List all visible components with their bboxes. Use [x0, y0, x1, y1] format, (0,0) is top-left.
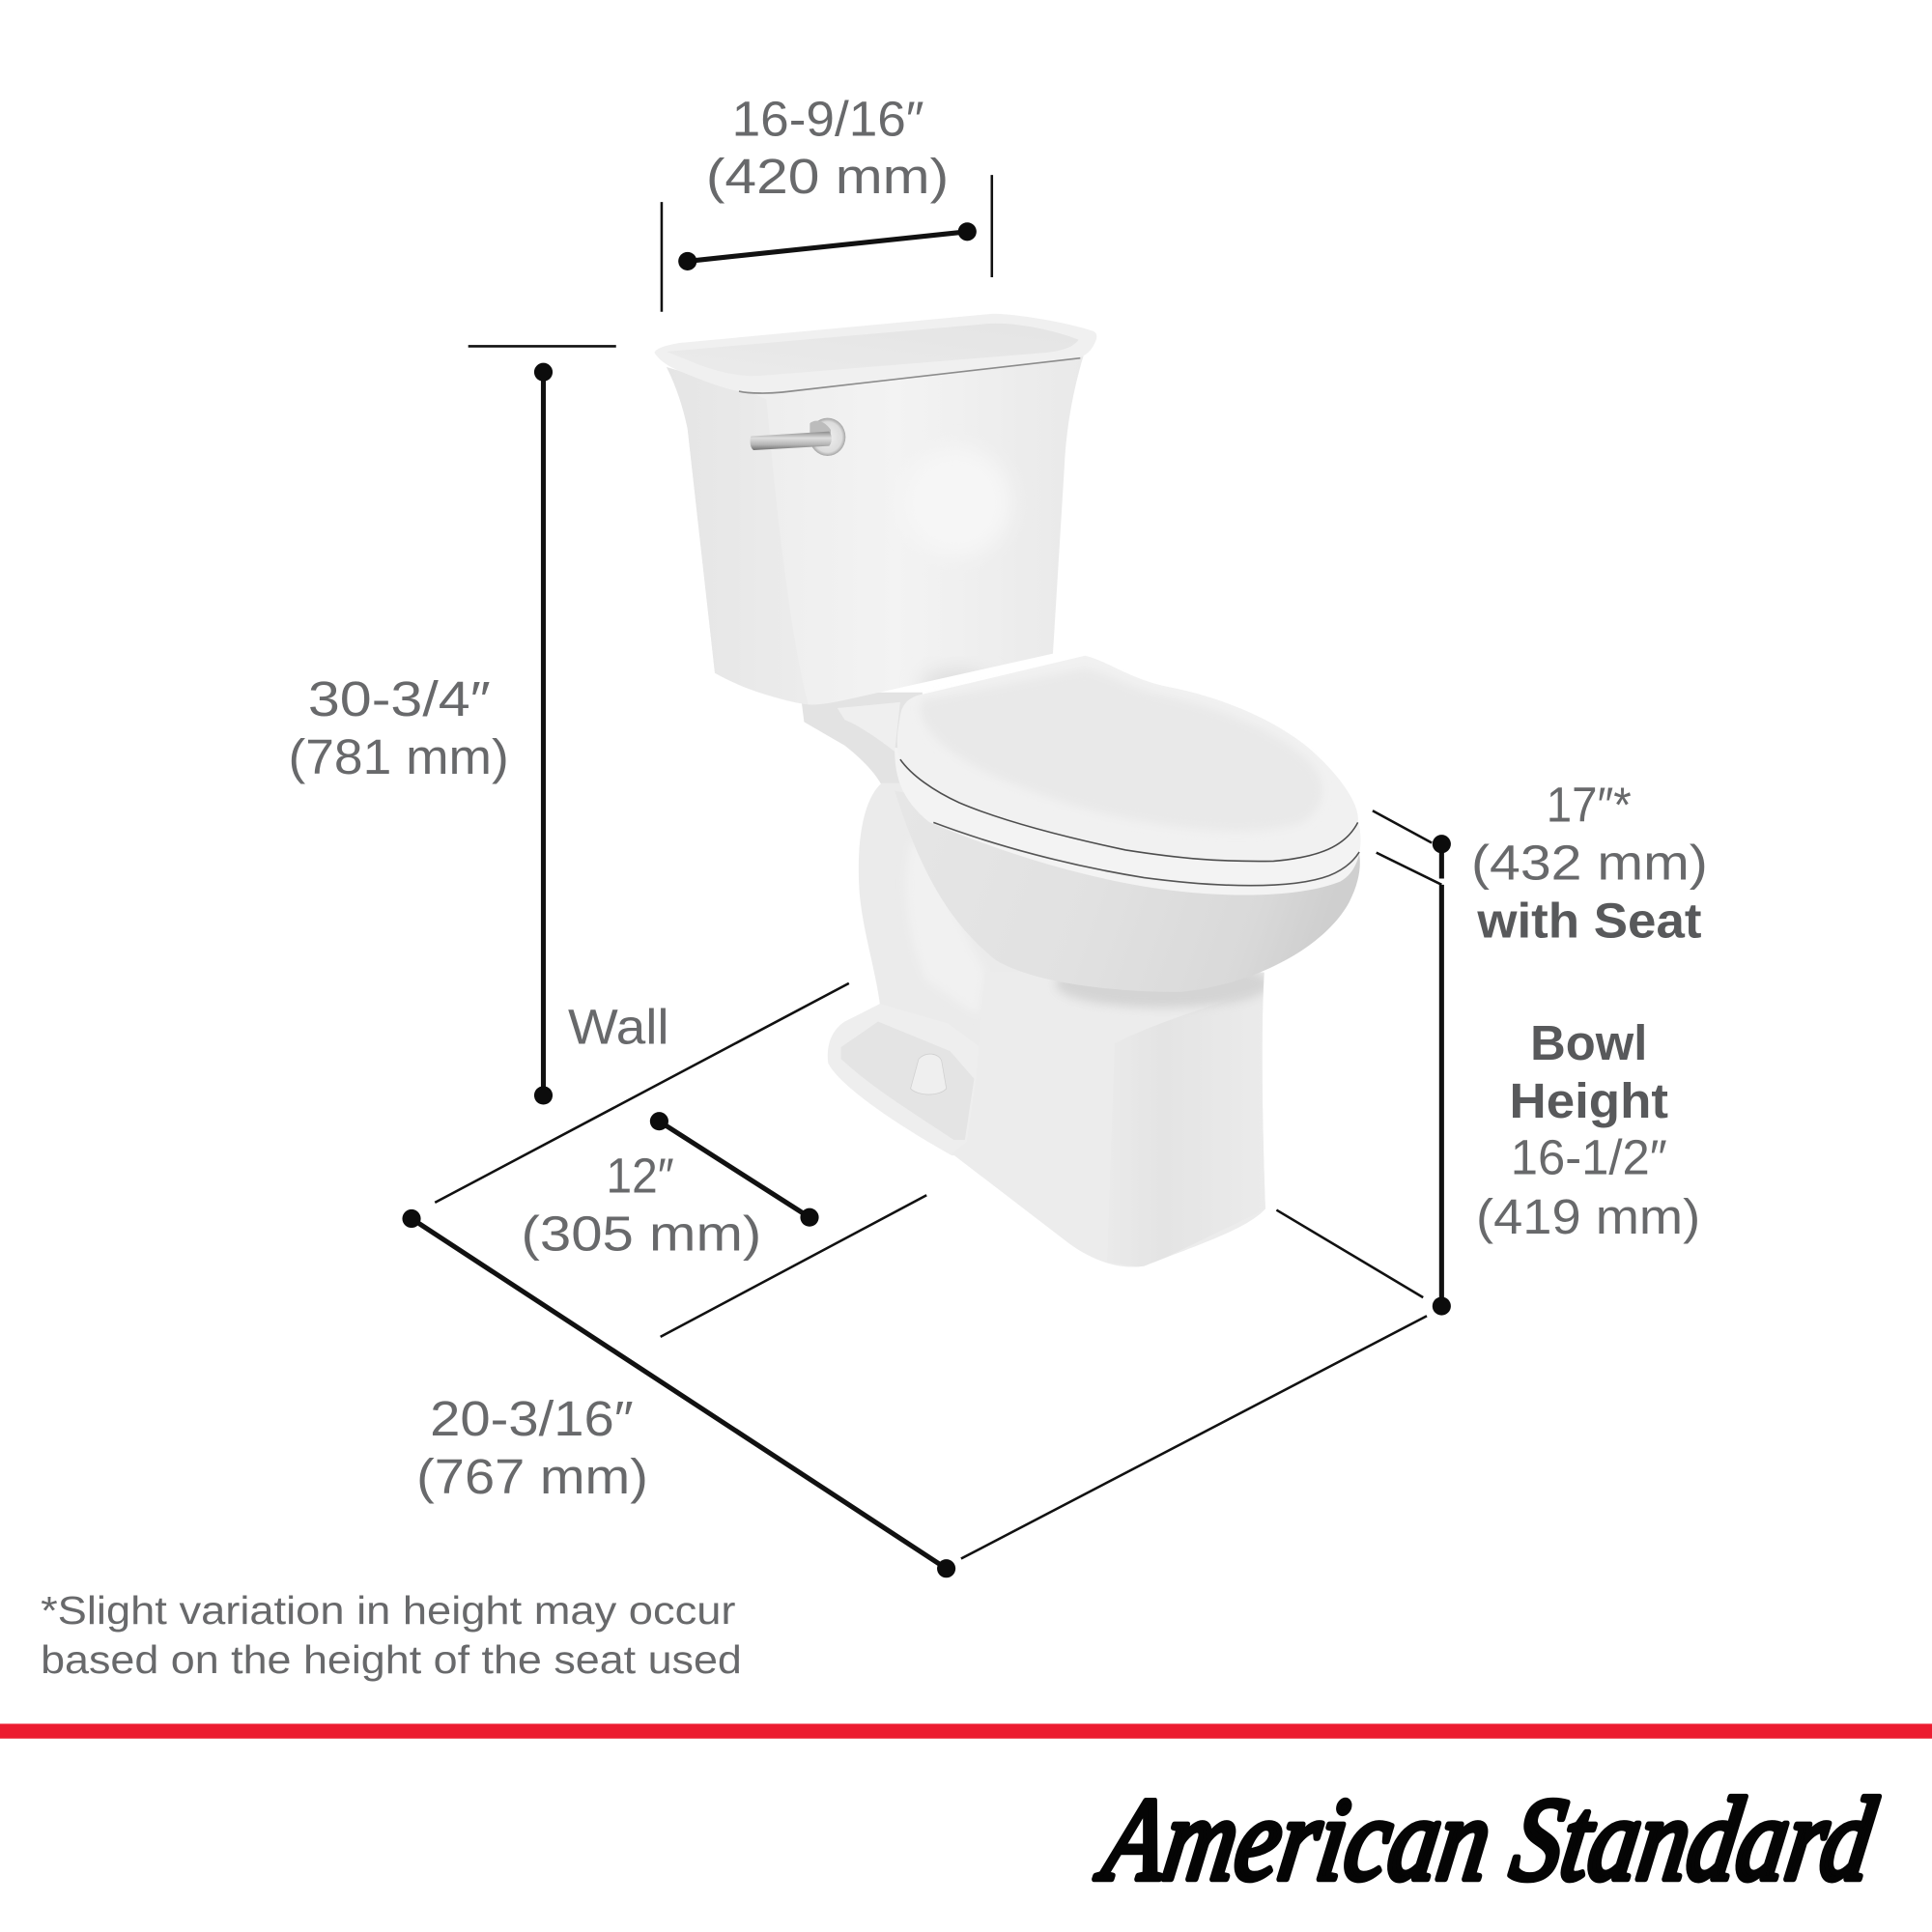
toilet pedestal — [952, 973, 1265, 1266]
toilet tank body — [654, 314, 1096, 704]
toilet base flange — [828, 1004, 985, 1155]
dimension: bowl height with seat: Bowl — [1530, 1015, 1647, 1070]
dimension: bowl height with seat: Height — [1509, 1073, 1668, 1128]
dimension: overall depth: 20-3/16″ — [430, 1391, 634, 1446]
dimension: bowl height with seat: 16-1/2″ — [1511, 1130, 1667, 1185]
dimension: rough-in: 12″ — [607, 1149, 674, 1204]
footnote: based on the height of the seat used — [41, 1637, 742, 1682]
toilet illustration — [654, 314, 1361, 1268]
footnote: *Slight variation in height may occur — [41, 1588, 735, 1633]
toilet lid inner panel — [921, 668, 1322, 831]
wall label: Wall — [568, 999, 669, 1054]
dimension: bowl height with seat: with Seat — [1476, 894, 1701, 949]
dimension: bowl height with seat: 17″* — [1547, 778, 1632, 833]
dimension: rough-in — [435, 983, 926, 1337]
dimension: overall height: (781 mm) — [288, 729, 509, 784]
dimension: tank width — [662, 91, 992, 312]
toilet bowl assembly — [828, 656, 1361, 1268]
dimension: tank width: 16-9/16″ — [732, 91, 924, 146]
toilet tank lid — [654, 314, 1096, 393]
dimension: bowl height with seat: (419 mm) — [1476, 1189, 1700, 1244]
dimension: overall depth: (767 mm) — [416, 1449, 648, 1504]
toilet seat lid — [897, 656, 1358, 862]
dimension: overall height — [288, 346, 616, 1104]
dimension: overall height: 30-3/4″ — [308, 671, 491, 726]
toilet flush handle — [751, 418, 845, 456]
dimension: bowl height with seat — [1373, 778, 1708, 1316]
toilet bowl basin — [895, 791, 1360, 992]
toilet seat ring — [895, 748, 1361, 895]
toilet neck connecting tank to bowl — [801, 693, 923, 799]
red divider bar — [0, 1723, 1932, 1739]
dimension: tank width: (420 mm) — [706, 149, 949, 204]
toilet rear trapway — [859, 783, 1034, 1051]
dimension: overall depth — [402, 1209, 1427, 1577]
dimension: rough-in: (305 mm) — [522, 1207, 761, 1262]
dimension: bowl height with seat: (432 mm) — [1471, 836, 1708, 891]
toilet drain cap — [911, 1054, 947, 1094]
footnote — [41, 1588, 742, 1682]
